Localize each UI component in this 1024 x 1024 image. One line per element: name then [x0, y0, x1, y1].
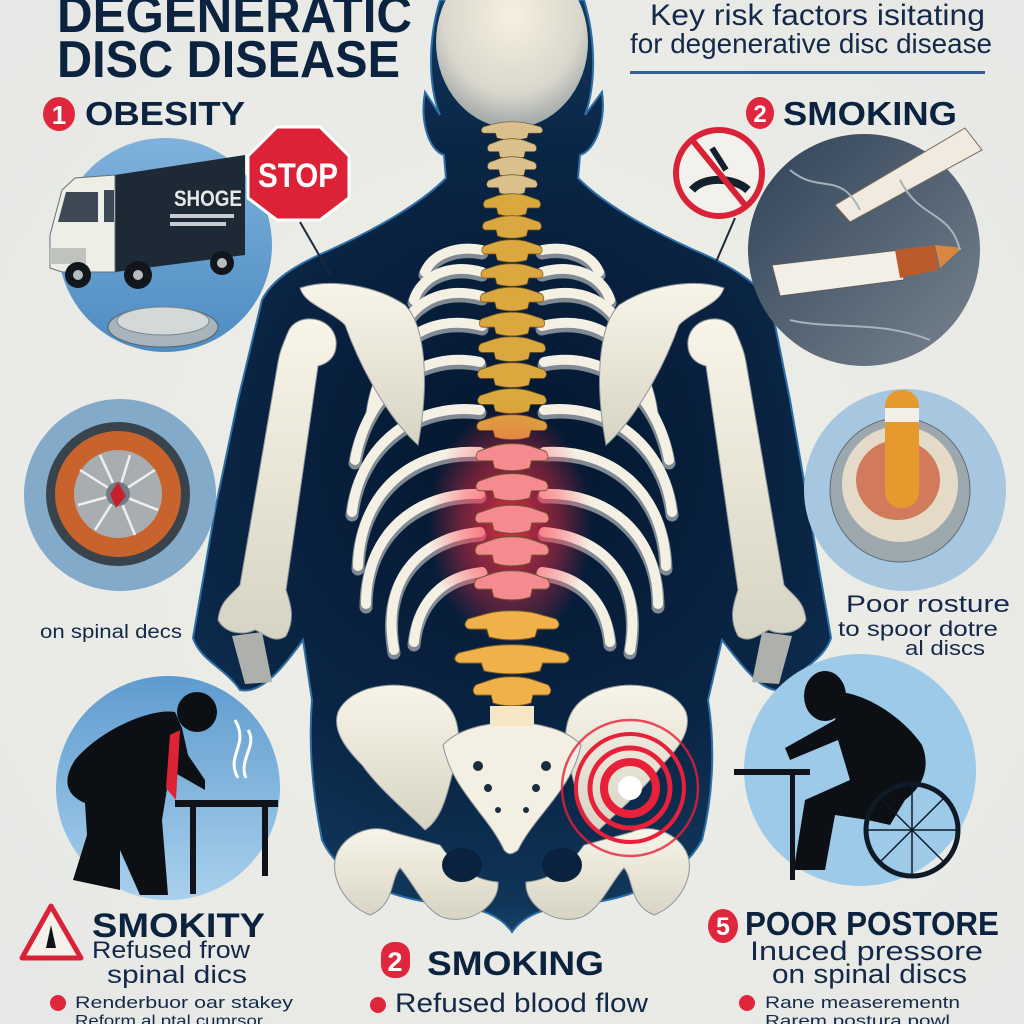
- heading: obesity: OBESITY: [85, 95, 245, 132]
- caption: on spinal discs: on spinal decs: [40, 622, 182, 643]
- human back silhouette: [193, 0, 831, 932]
- inflamed vertebrae: [474, 444, 550, 600]
- block: poor posture: [708, 905, 999, 1024]
- block: smoking: 2: [387, 947, 403, 977]
- spine: [428, 122, 592, 726]
- truck: [50, 155, 245, 289]
- panel: bent man smoking: [56, 676, 280, 900]
- block: smokity: SMOKITY: [92, 907, 265, 945]
- block: smokity: Renderbuor oar stakey: [75, 993, 294, 1012]
- thoracic vertebrae: [477, 194, 547, 439]
- panel: capsule on coin: [804, 389, 1006, 591]
- caption: poor posture: to spoor dotre: [838, 618, 998, 641]
- cigarette upper: [835, 128, 982, 222]
- cigarette lower: [772, 250, 904, 296]
- figure: [785, 692, 926, 870]
- block: poor posture: POOR POSTORE: [745, 905, 999, 942]
- title: [57, 0, 412, 89]
- pain target: [562, 720, 698, 856]
- stop sign: [248, 127, 349, 274]
- head: [177, 692, 217, 732]
- block: poor posture: Inuced pressore: [750, 936, 983, 966]
- title: DISC DISEASE: [57, 31, 400, 89]
- panel: damaged disc illustration: [24, 399, 216, 591]
- block: smokity: spinal dics: [107, 961, 247, 989]
- lumbar vertebrae: [455, 611, 569, 706]
- figure: [67, 712, 205, 895]
- stop sign: STOP: [258, 157, 338, 195]
- wheel: [866, 784, 958, 876]
- pain glow: [428, 405, 592, 645]
- smoke streaks: [790, 170, 960, 340]
- heading: obesity: 1: [52, 100, 66, 130]
- tie: [166, 730, 180, 800]
- truck: SHOGE: [174, 186, 242, 211]
- heading: smoking top right: 2: [753, 101, 767, 128]
- rib cage: [352, 249, 672, 653]
- block: smokity: [50, 907, 294, 1024]
- block: poor posture: on spinal discs: [772, 959, 967, 989]
- warning triangle: [22, 906, 81, 958]
- caption: poor posture: al discs: [905, 638, 985, 660]
- desk: [734, 769, 810, 880]
- panel: truck illustration: [50, 138, 272, 352]
- skull: [436, 0, 588, 128]
- cervical vertebrae: [481, 122, 543, 195]
- subtitle: [630, 0, 992, 74]
- caption: poor posture: Poor rosture: [846, 591, 1010, 618]
- no smoking sign: [676, 130, 762, 262]
- block: poor posture: Rane measerementn: [765, 993, 960, 1012]
- coin: [108, 307, 218, 347]
- block: smoking: SMOKING: [427, 945, 604, 983]
- block: smoking: Refused blood flow: [395, 988, 649, 1018]
- smoke: [234, 720, 251, 778]
- heading: smoking top right: SMOKING: [783, 95, 957, 132]
- block: poor posture: 5: [716, 913, 730, 941]
- block: smoking: [370, 942, 649, 1018]
- pelvis: [335, 685, 689, 919]
- panel: cigarettes illustration: [748, 128, 982, 366]
- shoulder blades and arm bones: [218, 283, 806, 684]
- caption: poor posture: [838, 591, 1010, 660]
- head: [804, 671, 846, 721]
- desk: [175, 800, 278, 894]
- block: smokity: Refused frow: [92, 937, 251, 964]
- subtitle: for degenerative disc disease: [630, 28, 992, 59]
- panel: man at desk: [734, 654, 976, 886]
